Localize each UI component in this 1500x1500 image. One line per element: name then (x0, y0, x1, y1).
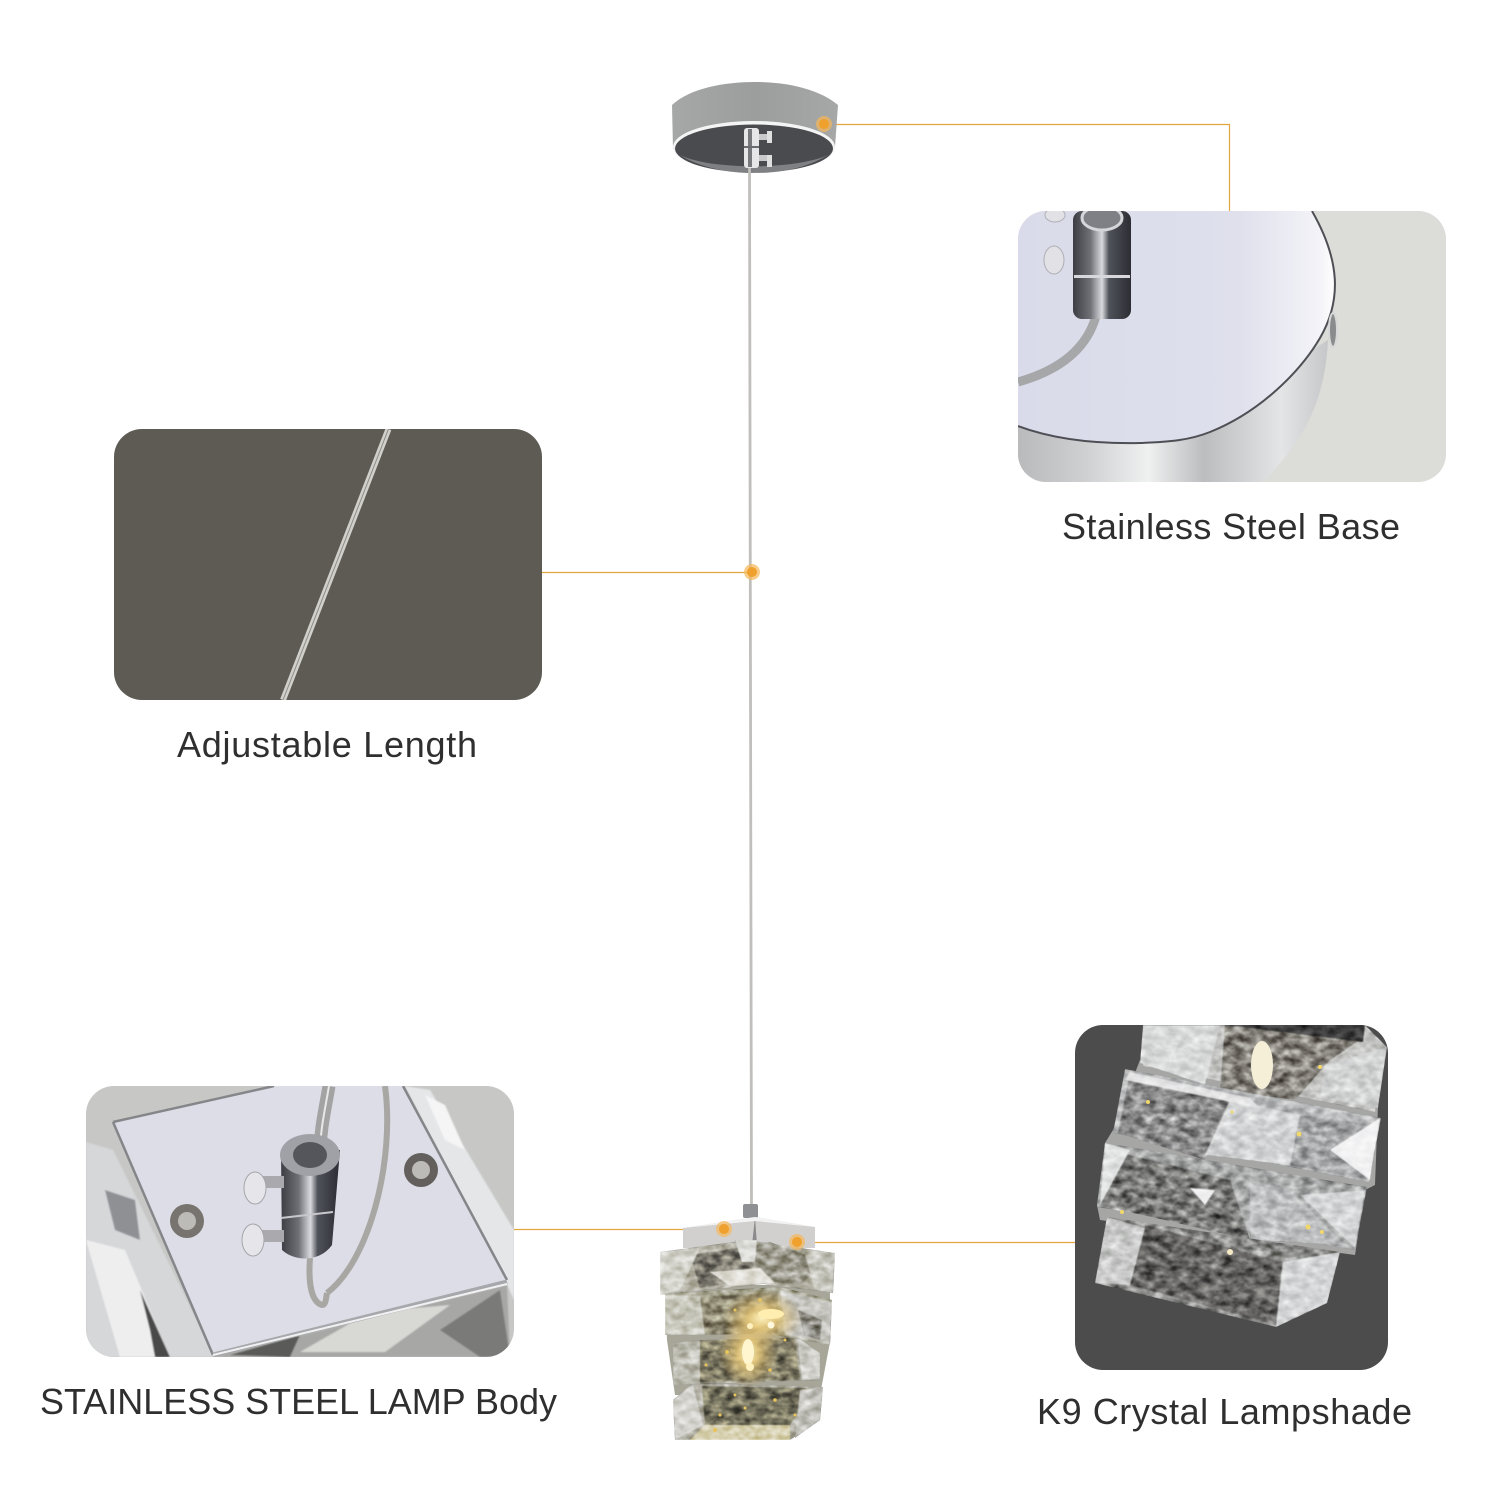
caption: stainless steel base: Stainless Steel Base (1062, 506, 1400, 547)
cable (1018, 316, 1096, 382)
fourth crystal block (1095, 1217, 1340, 1327)
top crystal block (1140, 1025, 1387, 1112)
crystal backing (665, 1285, 830, 1395)
panel: lamp body photo (86, 1086, 514, 1357)
clear thumb screws (242, 1172, 284, 1256)
plate edge (1018, 211, 1335, 443)
cord close-up (283, 429, 388, 700)
cable clamp (280, 1134, 340, 1258)
callout dot: crystal (789, 1234, 805, 1250)
plate rim (113, 1086, 507, 1355)
crystal tier 4 (673, 1383, 823, 1440)
callout dot: cord (744, 564, 760, 580)
callout dot: lamp body (716, 1221, 732, 1237)
ceiling canopy (672, 82, 838, 173)
clear screws (1044, 208, 1065, 274)
panel: stainless steel base photo (1018, 206, 1446, 482)
base side wall (1018, 340, 1328, 482)
lamp body top plate (683, 1204, 815, 1248)
crystal shade (660, 1240, 835, 1440)
callout line: crystal to detail photo (797, 1242, 1075, 1244)
bulb reflection (1251, 1041, 1273, 1089)
left crystal (86, 1142, 215, 1357)
caption: adjustable length: Adjustable Length (177, 724, 477, 765)
warm glow of bulb (704, 1290, 802, 1432)
bottom crystal (213, 1285, 510, 1357)
pendant lamp product (660, 82, 838, 1440)
yellow sparkles (1120, 1065, 1324, 1255)
metal cable clamp (1073, 206, 1131, 319)
stainless plate (113, 1086, 507, 1355)
callout line: cord to detail photo (542, 572, 752, 574)
crystal backing (1097, 1060, 1378, 1255)
caption: lamp body: STAINLESS STEEL LAMP Body (40, 1381, 557, 1422)
mounting plate face (1018, 211, 1335, 443)
second crystal block (1113, 1069, 1381, 1182)
plate screws (170, 1153, 438, 1238)
suspension cord (750, 168, 752, 1208)
callout line: base to detail photo (824, 124, 1230, 211)
crystal tier 1 (660, 1240, 835, 1295)
side screw (1329, 313, 1337, 347)
caption: K9 crystal lampshade: K9 Crystal Lampshade (1037, 1391, 1412, 1432)
crystal tier 2 (665, 1287, 832, 1345)
panel: K9 crystal photo (1075, 1025, 1388, 1370)
callout dot: base (816, 116, 832, 132)
cables (310, 1086, 387, 1305)
third crystal block (1097, 1143, 1367, 1250)
callout line: lamp body to detail photo (514, 1228, 724, 1230)
panel: adjustable length photo (114, 429, 542, 700)
right crystal (405, 1086, 514, 1300)
crystal tier 3 (673, 1337, 820, 1385)
